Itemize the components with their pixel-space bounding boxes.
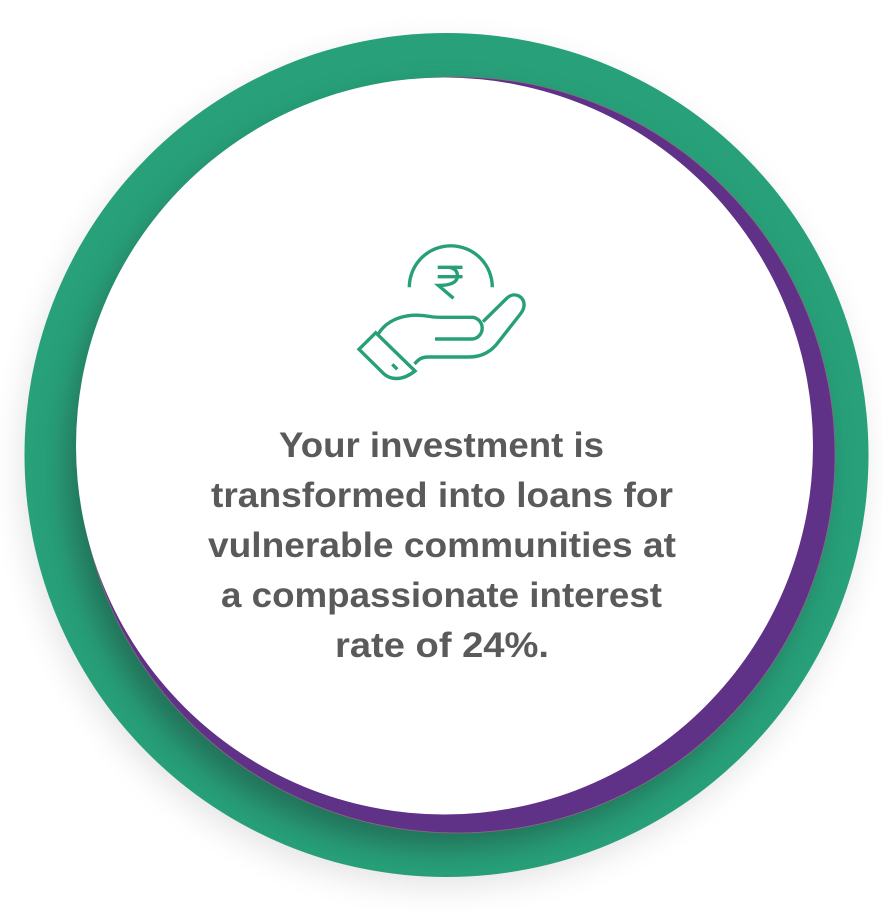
text block: description: vulnerable communities at [208,526,676,565]
text block: description [208,426,676,665]
icon: extended fingers [414,295,524,364]
icon: rupee symbol [438,267,462,298]
text block: description: Your investment is [279,426,604,465]
icon: hand holding rupee coin [359,246,524,378]
white inner circle [76,78,813,814]
icon: palm and thumb [378,315,482,339]
icon: coin arc [409,246,492,287]
text block: description: transformed into loans for [211,476,673,515]
text block: description: a compassionate interest [221,576,662,615]
icon: cuff button [392,364,397,369]
icon: shirt cuff [359,333,415,378]
purple crescent [79,77,835,833]
text block: description: rate of 24%. [335,626,549,665]
